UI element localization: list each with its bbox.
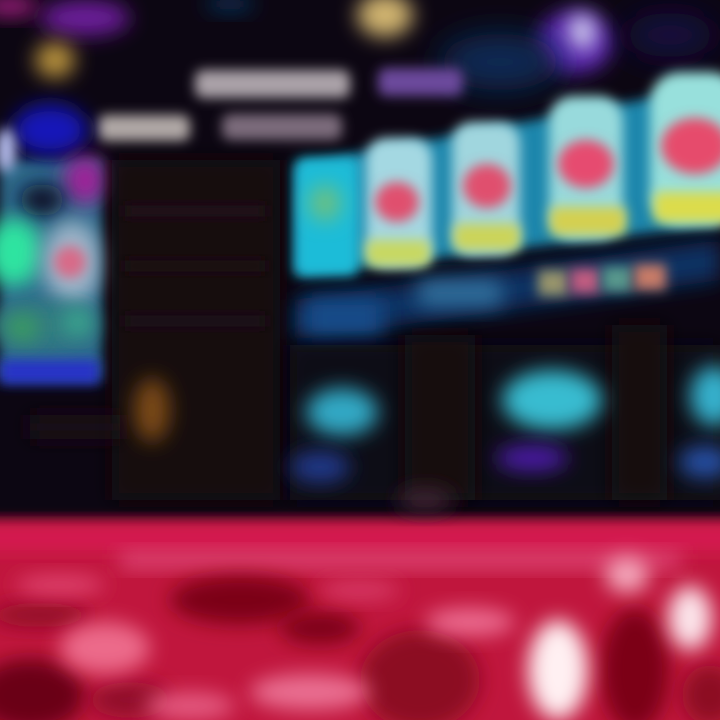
- card 4: [549, 96, 626, 240]
- card 2: [366, 138, 432, 268]
- panel: lower storefront: [290, 325, 720, 500]
- card 5: [650, 72, 720, 226]
- bright highlights: [15, 557, 712, 720]
- panel: dark centre column: [30, 160, 280, 500]
- dark red shapes: [0, 576, 720, 720]
- colourful sign: [538, 264, 666, 296]
- panel: left game screen: [0, 104, 107, 384]
- window glow 3: [679, 366, 720, 478]
- window glow 2: [496, 370, 602, 471]
- title: [98, 68, 463, 141]
- card 3: [452, 122, 520, 256]
- window glow 1: [290, 388, 378, 483]
- top decorations: [0, 0, 715, 90]
- icon: orange lantern: [134, 378, 170, 442]
- panel: blue sign band: [295, 240, 720, 340]
- panel: cyan banner row: [295, 72, 720, 276]
- card 1: [296, 158, 358, 276]
- panel: red crowd foreground: [0, 488, 720, 720]
